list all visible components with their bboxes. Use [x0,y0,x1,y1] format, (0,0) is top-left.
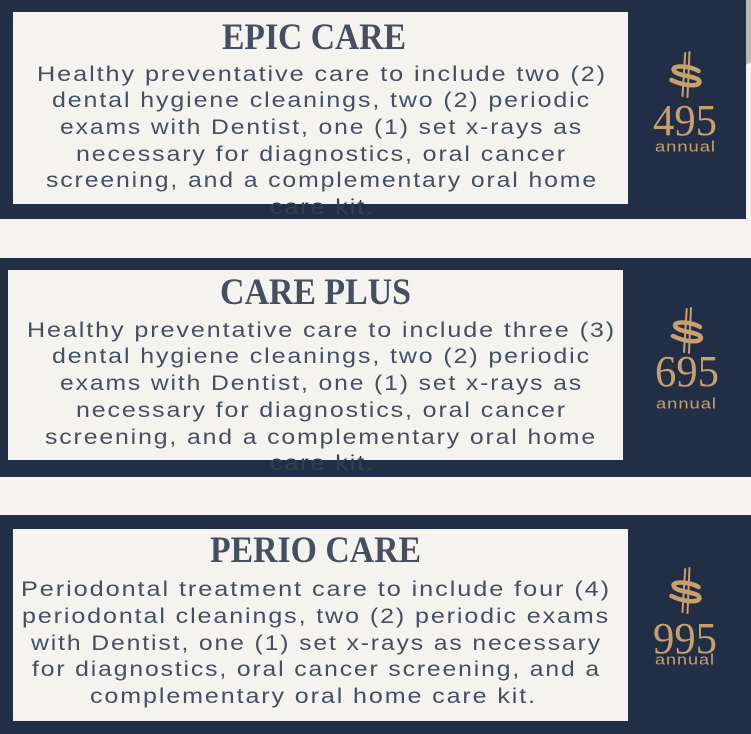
panel: Perio Care plan [0,515,751,734]
price: 695 annual: annual [656,396,717,412]
text block: Epic Care description: exams with Dentist, one (1) set x-rays as [60,116,583,139]
text block: Care Plus description: exams with Dentist, one (1) set x-rays as [60,372,583,395]
price: 695 annual: 695 [655,347,719,396]
text block: Perio Care description: periodontal cleanings, two (2) periodic exams [22,605,610,628]
text block: Epic Care description [37,63,607,219]
text block: Epic Care description: Healthy preventative care to include two (2) [37,63,607,86]
text block: Epic Care description: care kit. [270,196,375,219]
heading: Perio Care: PERIO CARE [210,530,421,571]
price: 995 annual: 995 [653,614,717,663]
text block: Care Plus description: necessary for diagnostics, oral cancer [76,399,567,422]
price: 995 annual: annual [655,652,715,668]
panel: Epic Care plan [0,0,746,219]
text block: Care Plus description: screening, and a complementary oral home [45,426,597,449]
text block: Perio Care description: for diagnostics, oral cancer screening, and a [32,658,601,681]
icon: dollar sign [673,308,701,353]
icon: dollar sign [672,568,700,613]
price: 495 annual: annual [655,138,716,156]
text block: Care Plus description: Healthy preventative care to include three (3) [27,319,616,342]
text block: Care Plus description: dental hygiene cleanings, two (2) periodic [52,345,591,368]
text block: Perio Care description [21,578,611,708]
heading: Epic Care: EPIC CARE [222,17,406,58]
text block: Epic Care description: necessary for diagnostics, oral cancer [76,143,567,166]
heading: Care Plus: CARE PLUS [220,272,411,313]
text block: Care Plus description [27,319,616,475]
price: 495 annual: 495 [653,96,717,145]
text block: Perio Care description: complementary oral home care kit. [90,685,537,708]
text block: Perio Care description: Periodontal treatment care to include four (4) [21,578,611,601]
text block: Epic Care description: screening, and a complementary oral home [46,169,598,192]
text block: Epic Care description: dental hygiene cleanings, two (2) periodic [52,89,591,112]
icon: dollar sign [672,52,700,97]
text block: Care Plus description: care kit. [270,452,375,475]
panel: Care Plus plan [0,258,751,477]
text block: Perio Care description: with Dentist, one (1) set x-rays as necessary [30,632,602,655]
